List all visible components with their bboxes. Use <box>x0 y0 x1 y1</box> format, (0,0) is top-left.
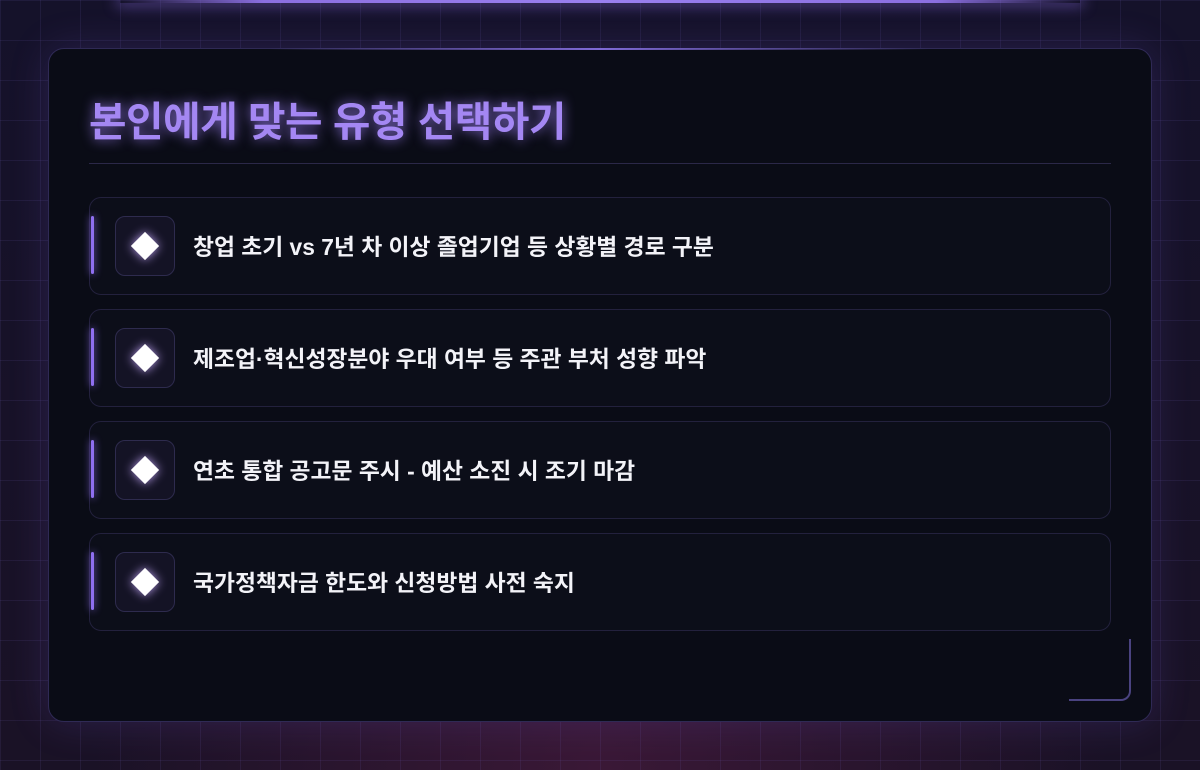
top glow line <box>120 0 1080 3</box>
item 1 <box>89 197 1111 295</box>
text 3: 연초 통합 공고문 주시 - 예산 소진 시 조기 마감 <box>193 458 635 484</box>
corner accent <box>1069 639 1131 701</box>
icon: diamond <box>115 552 175 612</box>
item 2 <box>89 309 1111 407</box>
text 4: 국가정책자금 한도와 신청방법 사전 숙지 <box>193 570 575 596</box>
title: 본인에게 맞는 유형 선택하기 <box>89 99 566 145</box>
icon: diamond <box>115 440 175 500</box>
icon: diamond <box>115 216 175 276</box>
item 3 <box>89 421 1111 519</box>
text 1: 창업 초기 vs 7년 차 이상 졸업기업 등 상황별 경로 구분 <box>193 234 714 260</box>
icon: diamond <box>115 328 175 388</box>
item 4 <box>89 533 1111 631</box>
text 2: 제조업·혁신성장분야 우대 여부 등 주관 부처 성향 파악 <box>193 346 706 372</box>
